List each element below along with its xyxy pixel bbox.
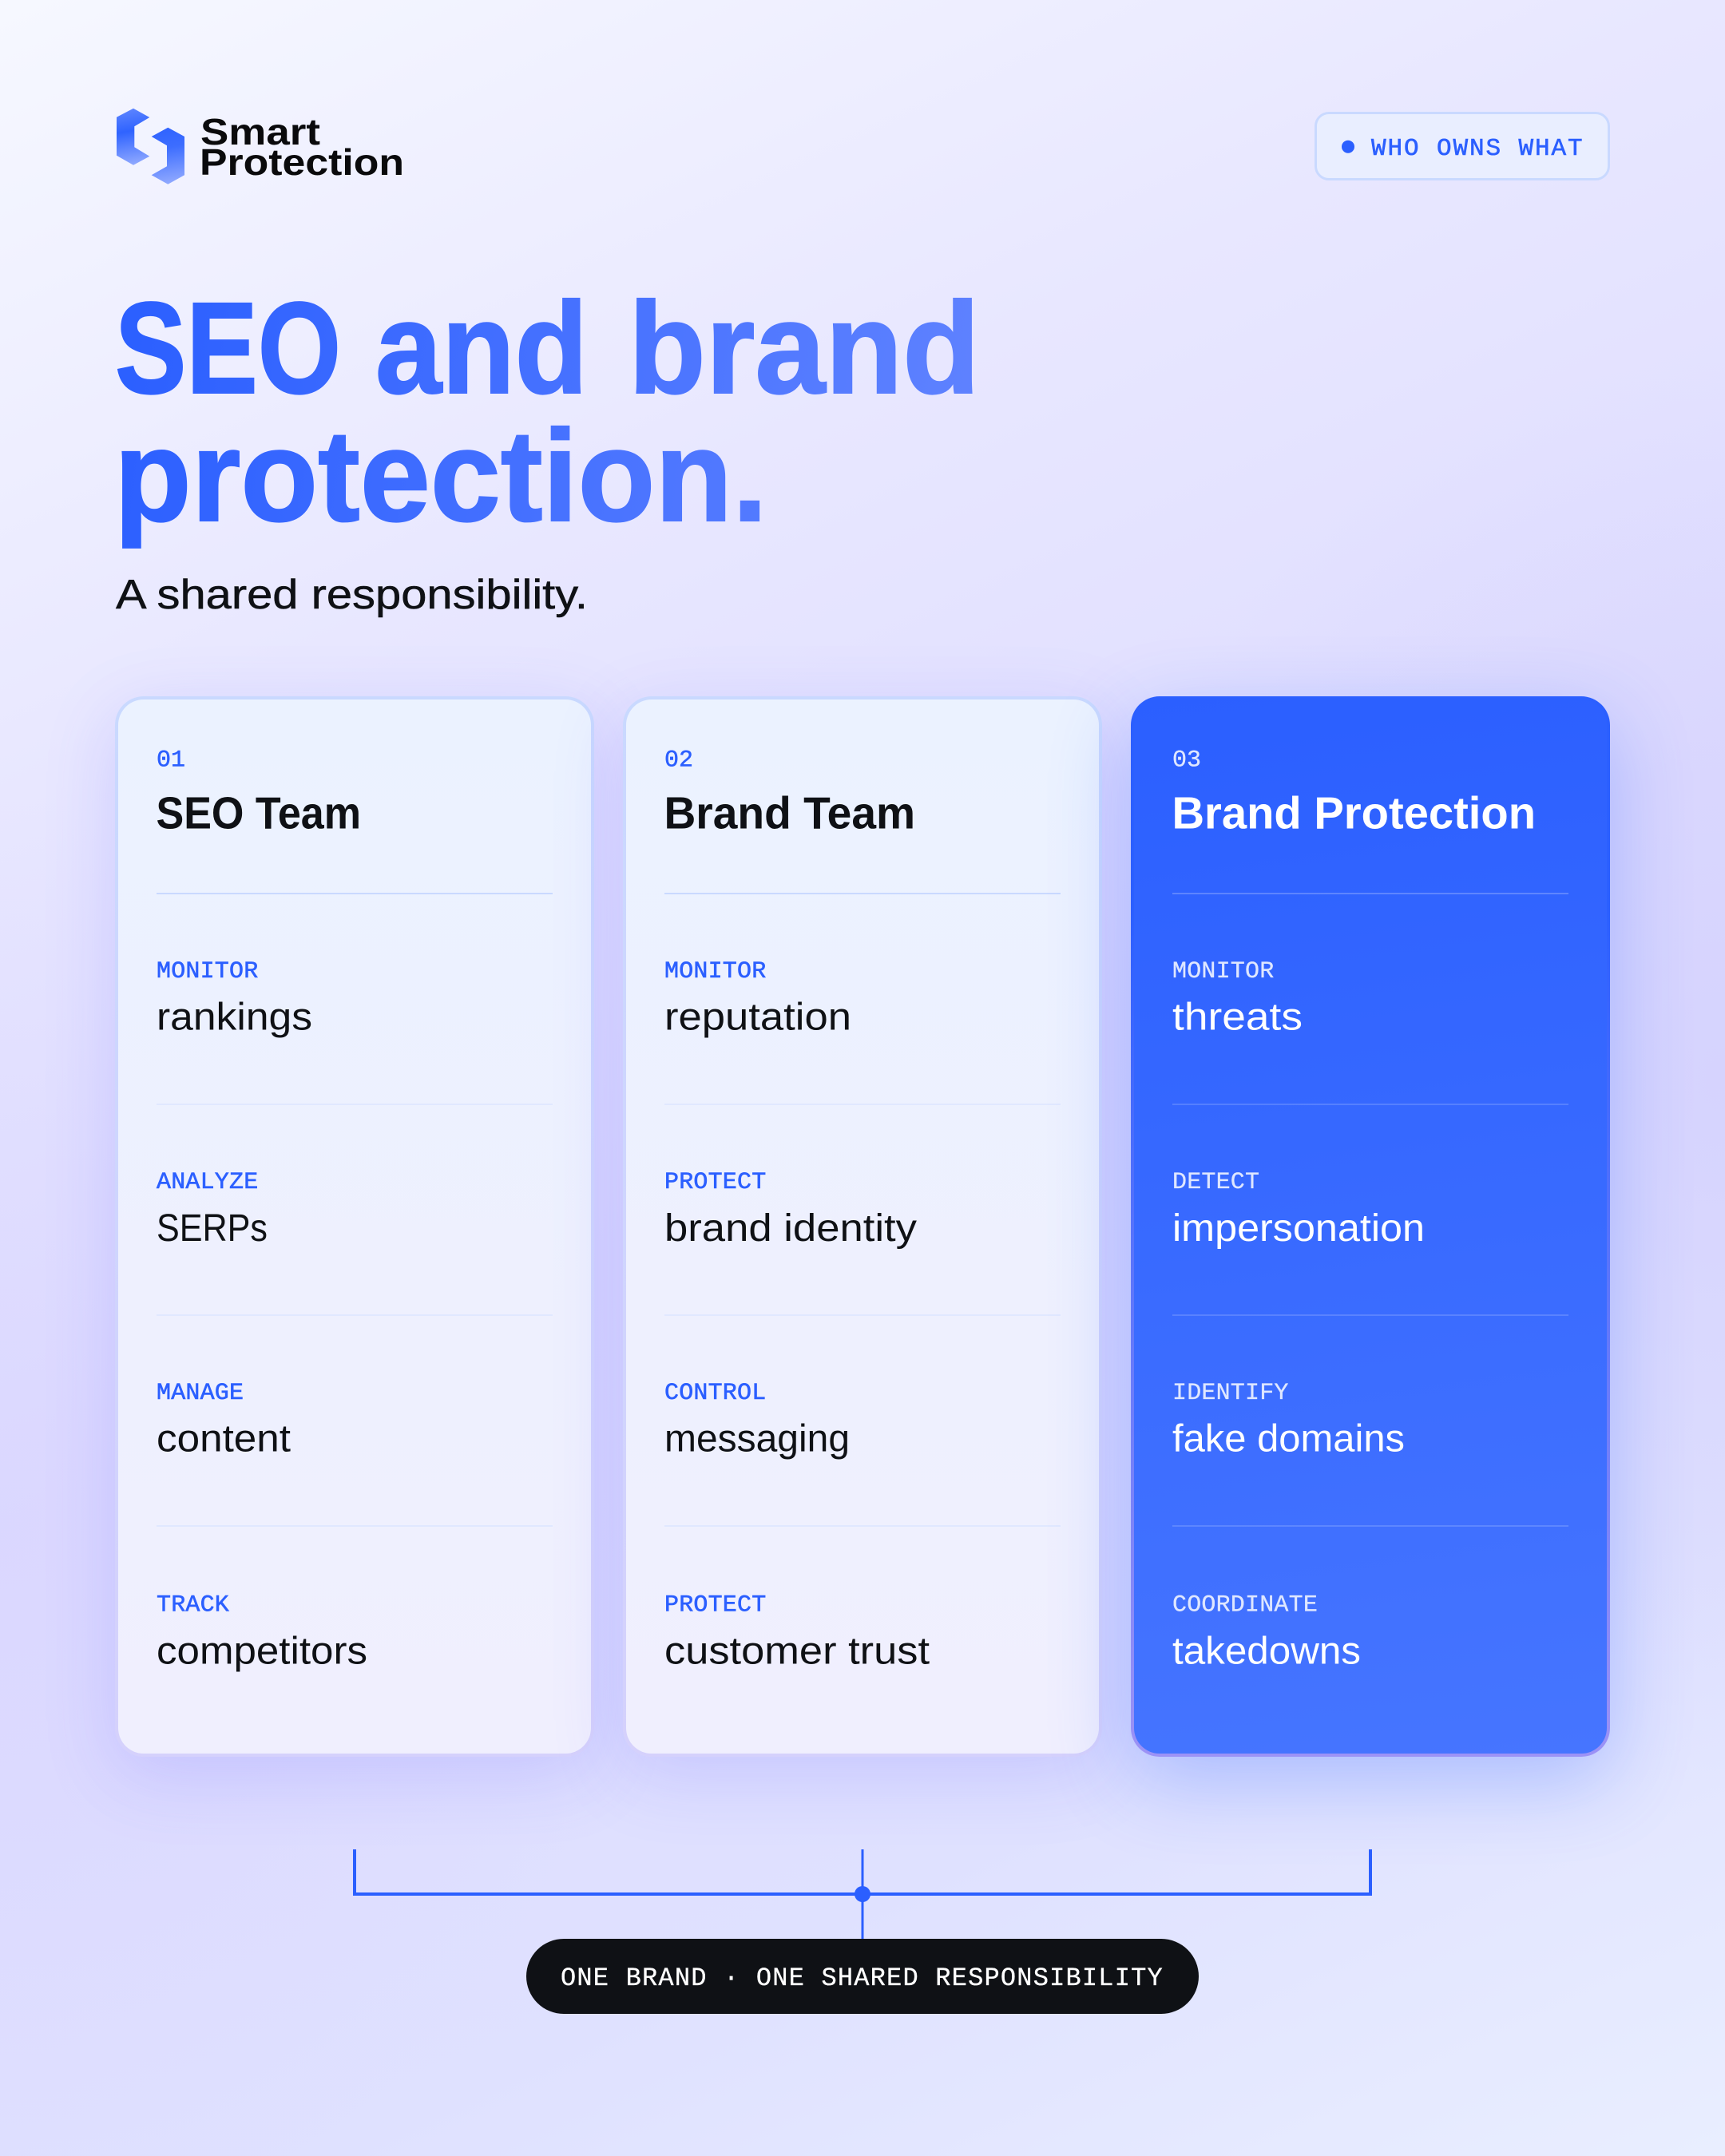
item: monitor reputation bbox=[664, 958, 851, 1038]
item: protect brand identity: brand identity bbox=[664, 1207, 917, 1250]
footer pill bbox=[526, 1939, 1199, 2014]
tag: who owns what: WHO OWNS WHAT bbox=[1371, 135, 1584, 163]
item: track competitors: competitors bbox=[157, 1631, 367, 1672]
item: control messaging: CONTROL bbox=[664, 1380, 766, 1407]
item: identify fake domains: fake domains bbox=[1172, 1418, 1405, 1460]
heading: Brand Team: Brand Team bbox=[664, 787, 915, 838]
item: track competitors bbox=[157, 1592, 367, 1672]
item: monitor threats: threats bbox=[1172, 997, 1303, 1038]
item: manage content: MANAGE bbox=[157, 1380, 244, 1407]
item: detect impersonation bbox=[1172, 1169, 1425, 1250]
item: manage content bbox=[157, 1380, 291, 1460]
heading: Brand Protection: Brand Protection bbox=[1172, 787, 1536, 838]
title: brand bbox=[629, 275, 980, 421]
item: coordinate takedowns: takedowns bbox=[1172, 1631, 1361, 1672]
item: detect impersonation: impersonation bbox=[1172, 1207, 1425, 1250]
item: monitor threats bbox=[1172, 958, 1303, 1038]
item: monitor threats: MONITOR bbox=[1172, 958, 1274, 985]
item: manage content: content bbox=[157, 1418, 291, 1460]
panel: Brand Protection bbox=[1131, 696, 1610, 1757]
title: and bbox=[375, 275, 588, 421]
item: monitor reputation: MONITOR bbox=[664, 958, 766, 985]
item: analyze SERPs bbox=[157, 1169, 268, 1250]
item: control messaging: messaging bbox=[664, 1418, 850, 1460]
title: SEO bbox=[115, 275, 341, 421]
item: coordinate takedowns bbox=[1172, 1592, 1361, 1672]
item: control messaging bbox=[664, 1380, 850, 1460]
item: analyze SERPs: SERPs bbox=[157, 1207, 268, 1250]
subtitle: A shared responsibility. bbox=[116, 572, 588, 618]
tag: who owns what bbox=[1315, 112, 1610, 180]
item: monitor rankings: MONITOR bbox=[157, 958, 258, 985]
item: detect impersonation: DETECT bbox=[1172, 1169, 1259, 1196]
item: track competitors: TRACK bbox=[157, 1592, 229, 1619]
title: protection. bbox=[114, 402, 767, 549]
panel: Brand Team bbox=[623, 696, 1102, 1757]
connector bracket bbox=[353, 1849, 1372, 1939]
logo: Smart Protection bbox=[117, 109, 404, 184]
item: identify fake domains: IDENTIFY bbox=[1172, 1380, 1289, 1407]
item: protect customer trust bbox=[664, 1592, 930, 1672]
heading: SEO Team: SEO Team bbox=[157, 787, 361, 838]
panel: SEO Team bbox=[115, 696, 594, 1757]
item: analyze SERPs: ANALYZE bbox=[157, 1169, 258, 1196]
item: monitor rankings: rankings bbox=[157, 997, 312, 1038]
logo: Smart Protection: Protection bbox=[200, 141, 404, 183]
number 01: 01 bbox=[157, 747, 185, 775]
title bbox=[114, 275, 980, 549]
logo: Smart Protection: Smart bbox=[200, 111, 320, 153]
item: monitor rankings bbox=[157, 958, 312, 1038]
number 02: 02 bbox=[664, 747, 693, 775]
item: identify fake domains bbox=[1172, 1380, 1405, 1460]
item: protect brand identity bbox=[664, 1169, 917, 1250]
item: monitor reputation: reputation bbox=[664, 997, 851, 1038]
item: protect brand identity: PROTECT bbox=[664, 1169, 766, 1196]
item: protect customer trust: customer trust bbox=[664, 1631, 930, 1672]
footer pill: ONE BRAND · ONE SHARED RESPONSIBILITY bbox=[561, 1964, 1164, 1993]
number 03: 03 bbox=[1172, 747, 1201, 775]
item: coordinate takedowns: COORDINATE bbox=[1172, 1592, 1318, 1619]
item: protect customer trust: PROTECT bbox=[664, 1592, 766, 1619]
